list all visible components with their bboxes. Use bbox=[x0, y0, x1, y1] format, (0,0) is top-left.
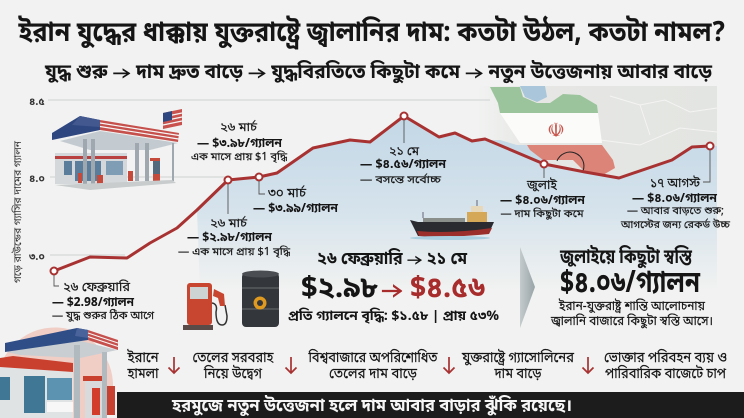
arrow: down 4 bbox=[582, 357, 594, 373]
cause: crude price: বিশ্ববাজারে অপরিশোধিত bbox=[308, 349, 439, 368]
cause: oil supply: নিয়ে উদ্বেগ bbox=[203, 365, 263, 384]
y axis labels: ৪.০ bbox=[29, 173, 45, 187]
label: 21 May: ২১ মে bbox=[389, 144, 420, 160]
label: July: জুলাই bbox=[526, 177, 557, 195]
label: 26 February: — $2.98/গ্যালন bbox=[52, 296, 134, 312]
arrow: down 3 bbox=[444, 357, 454, 373]
label: 26 March lower bbox=[178, 215, 291, 260]
cause: consumer cost bbox=[604, 349, 727, 384]
label: 26 March upper: ২৬ মার্চ bbox=[220, 119, 258, 136]
black footer bar: হরমুজে নতুন উত্তেজনা হলে দাম আবার বাড়ার ঝুঁকি রয়েছে। bbox=[171, 395, 572, 418]
panel: price rise summary: $২.৯৮ bbox=[301, 270, 378, 309]
panel: July relief bbox=[550, 244, 713, 331]
y axis labels: ৪.৫ bbox=[29, 96, 45, 110]
label: 21 May: — $৪.৫৬/গ্যালন bbox=[360, 158, 446, 174]
label: 30 March: — $৩.৯৯/গ্যালন bbox=[253, 202, 338, 218]
arrow: down 2 bbox=[286, 357, 296, 373]
cause: attack on Iran: হামলা bbox=[127, 365, 159, 384]
label: 30 March: ৩০ মার্চ bbox=[268, 185, 306, 203]
cause: US gasoline: দাম বাড়ে bbox=[494, 365, 542, 384]
icon: gas station bottom left bbox=[0, 327, 118, 418]
label: 26 February: ২৬ ফেব্রুয়ারি bbox=[63, 279, 131, 297]
icon: fuel pump bbox=[183, 283, 227, 330]
label: 26 March lower: — এক মাসে প্রায় $1 বৃদ্ধি bbox=[178, 245, 291, 260]
icon: gas station top left bbox=[52, 116, 179, 190]
cause: US gasoline bbox=[461, 349, 575, 384]
y axis labels bbox=[29, 96, 45, 265]
subtitle: যুদ্ধ শুরু → দাম দ্রুত বাড়ে → যুদ্ধবিরতিতে কিছুটা কমে → নতুন উত্তেজনায় আবার বাড়ে bbox=[44, 60, 713, 86]
panel: price rise summary: $৪.৫৬ bbox=[410, 270, 485, 309]
arrow: down 1 bbox=[168, 357, 180, 373]
icon: oil barrel bbox=[242, 270, 279, 327]
label: 21 May bbox=[360, 144, 446, 188]
gridlines bbox=[48, 100, 490, 255]
panel: price rise summary bbox=[288, 248, 499, 326]
price line chart bbox=[50, 112, 714, 286]
Iran emblem: ☫ bbox=[547, 120, 565, 146]
label: July bbox=[500, 177, 585, 222]
panel: July relief: ইরান-যুক্তরাষ্ট্র শান্তি আলোচনায় bbox=[558, 298, 705, 316]
label: 17 August: — $৪.০৬/গ্যালন bbox=[632, 192, 717, 208]
panel: price rise summary: → bbox=[381, 273, 403, 308]
label: 17 August: — আবার বাড়তে শুরু; bbox=[627, 205, 724, 219]
panel: July relief: জুলাইয়ে কিছুটা স্বস্তি bbox=[559, 244, 692, 272]
causal chain bbox=[127, 349, 727, 384]
panel: price rise summary: প্রতি গ্যালনে বৃদ্ধি: $১.৫৮ | প্রায় ৫৩% bbox=[288, 307, 499, 326]
cause: crude price: তেলের দাম বাড়ে bbox=[329, 365, 418, 384]
y axis labels: ৩.০ bbox=[29, 251, 45, 265]
label: 17 August: আগস্টের জন্য রেকর্ড উচ্চ bbox=[620, 217, 730, 233]
label: 26 February: — যুদ্ধ শুরুর ঠিক আগে bbox=[52, 309, 155, 324]
label: 26 March upper: এক মাসে প্রায় $1 বৃদ্ধি bbox=[191, 150, 288, 165]
cause: crude price bbox=[308, 349, 439, 384]
icon: oil tanker bbox=[410, 200, 494, 240]
cause: oil supply bbox=[192, 349, 274, 384]
label: 26 March lower: ২৬ মার্চ bbox=[210, 215, 248, 232]
label: 26 March upper bbox=[191, 119, 288, 165]
label: 30 March bbox=[253, 185, 338, 218]
label: 17 August: ১৭ আগস্ট bbox=[650, 175, 700, 193]
y axis title: গড়ে রাউন্ডের গ্যাসির দামের গ্যালন bbox=[12, 140, 26, 283]
Hormuz marker bbox=[557, 152, 584, 171]
cause: consumer cost: পারিবারিক বাজেটে চাপ bbox=[605, 365, 727, 384]
label: 26 March upper: — $৩.৯৮/গ্যালন bbox=[197, 137, 282, 153]
panel: July relief: $৪.০৬/গ্যালন bbox=[560, 265, 700, 305]
label: 17 August bbox=[620, 175, 730, 233]
label: July: — $৪.০৬/গ্যালন bbox=[500, 194, 585, 210]
cause: attack on Iran: ইরানে bbox=[127, 349, 159, 368]
icon: US flag top bbox=[163, 109, 182, 129]
black footer bar bbox=[117, 392, 744, 418]
label: 26 February bbox=[52, 279, 155, 324]
cause: attack on Iran bbox=[127, 349, 159, 384]
label: July: — দাম কিছুটা কমে bbox=[500, 207, 584, 222]
arrow: chevron divider bbox=[520, 247, 535, 328]
panel: July relief: জ্বালানি বাজারে কিছুটা স্বস্তি আসে। bbox=[550, 313, 713, 331]
cause: consumer cost: ভোক্তার পরিবহন ব্যয় ও bbox=[604, 349, 727, 368]
label: 21 May: — বসন্তে সর্বোচ্চ bbox=[360, 172, 441, 188]
label: 26 March lower: — $২.৯৮/গ্যালন bbox=[187, 231, 272, 247]
panel: price rise summary: ২৬ ফেব্রুয়ারি → ২১ মে bbox=[317, 248, 467, 271]
cause: oil supply: তেলের সরবরাহ bbox=[192, 349, 274, 368]
cause: US gasoline: যুক্তরাষ্ট্রে গ্যাসোলিনের bbox=[461, 349, 575, 368]
area under line chart bbox=[197, 116, 717, 290]
map: Iran and surrounding region bbox=[478, 86, 717, 204]
